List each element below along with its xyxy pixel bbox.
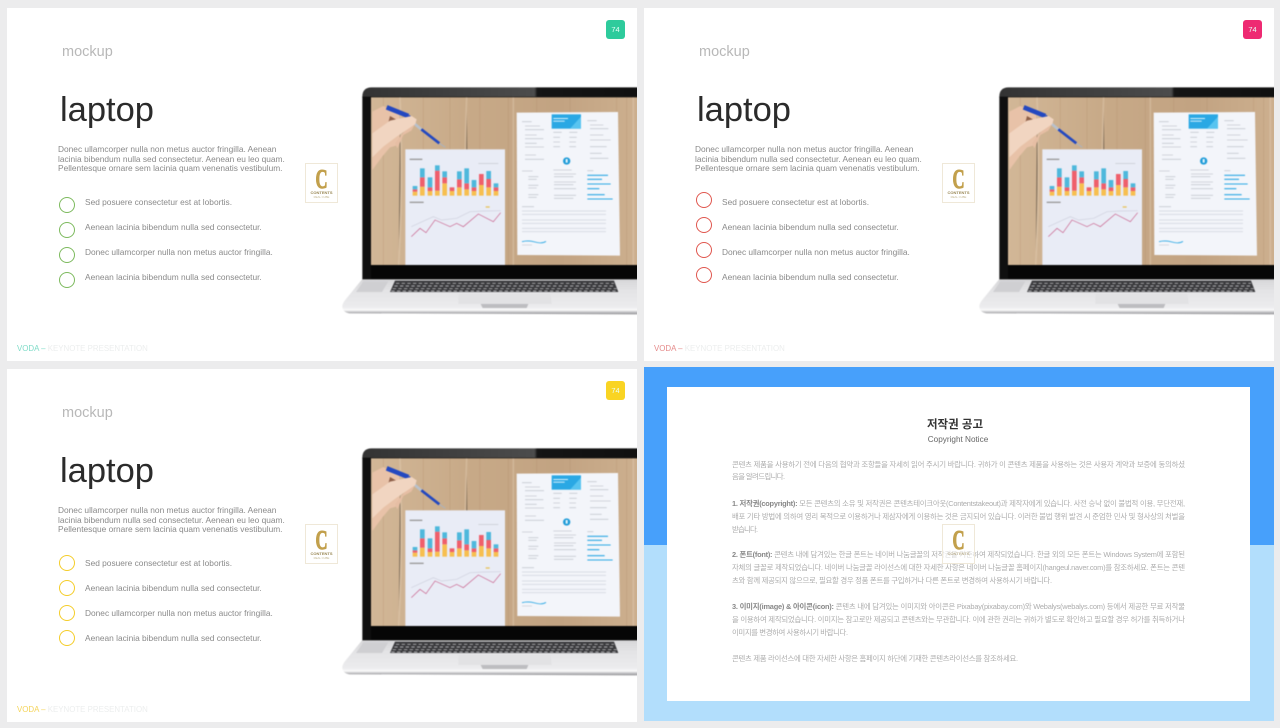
list item 4 [59,630,262,646]
section label: mockup [699,44,750,60]
notice body: 콘텐츠 제품을 사용하기 전에 다음의 협약과 조항들을 자세히 읽어 주시기 바랍니다. 귀하가 이 콘텐츠 제품을 사용하는 것은 사용자 계약과 보증에 동의하셨 [732,460,1185,469]
intro paragraph: Donec ullamcorper nulla non metus auctor fringilla. Aenean [695,144,913,154]
notice body: 음을 알려드립니다. [732,472,785,481]
panel: red laptop slide [644,8,1274,361]
heading: laptop [60,452,154,490]
list item 1: Sed posuere consectetur est at lobortis. [85,558,232,568]
list item 3: Donec ullamcorper nulla non metus auctor fringilla. [85,608,273,618]
heading: laptop [697,91,791,129]
intro paragraph: lacinia bibendum nulla sed consectetur. Aenean eu leo quam. [58,515,285,525]
list item 4 [696,267,899,283]
list item 2: Aenean lacinia bibendum nulla sed consectetur. [85,583,262,593]
intro paragraph: Donec ullamcorper nulla non metus auctor fringilla. Aenean [58,505,276,515]
notice title: 저작권 공고 [927,417,983,431]
logo watermark: C [952,525,965,555]
intro paragraph: Pellentesque ornare sem lacinia quam venenatis vestibulum. [58,524,282,534]
list item 3: Donec ullamcorper nulla non metus auctor fringilla. [722,247,910,257]
notice body: 츠와 함께 제공되지 않으므로, 필요할 경우 정품 폰트를 구입하거나 다른 폰트로 변경하여 사용하시기 바랍니다. [732,576,1052,585]
intro paragraph: Donec ullamcorper nulla non metus auctor fringilla. Aenean [58,144,276,154]
logo watermark [305,163,338,203]
page number tag [606,381,625,400]
logo watermark: REAL CUBE [951,195,966,199]
footer: VODA – KEYNOTE PRESENTATION [17,344,148,353]
intro paragraph [58,505,285,534]
notice body: 2. 폰트(font): 콘텐츠 내에 담겨있는 한글 폰트는 네이버 나눔글꼴의 저작권을 기준하여 제작되었습니다. 한글 외의 모든 폰트는 Windows System에 포함된 [732,550,1185,559]
logo watermark: CONTENTS [310,190,332,195]
logo watermark: CONTENTS [310,551,332,556]
intro paragraph: lacinia bibendum nulla sed consectetur. Aenean eu leo quam. [695,154,922,164]
notice body: 1. 저작권(copyright): 모든 콘텐츠의 소유 및 저작권은 콘텐츠테이크아웃(Contentstakeout)과 제작자에게 있습니다. 사전 승낙 없이 불법적 이용, 무단전재, [732,499,1185,508]
logo watermark: REAL CUBE [314,195,329,199]
list item 4: Aenean lacinia bibendum nulla sed consectetur. [85,633,262,643]
heading: laptop [60,91,154,129]
logo watermark [942,524,975,564]
section label: mockup [62,405,113,421]
notice subtitle: Copyright Notice [928,435,989,444]
list item 3 [59,247,273,263]
notice body: 받습니다. [732,525,758,534]
list item 4: Aenean lacinia bibendum nulla sed consectetur. [722,272,899,282]
logo watermark: C [315,164,328,194]
laptop image [342,448,637,676]
white notice card [667,387,1250,701]
notice body: 을 이용하여 제작되었습니다. 이미지는 참고로만 제공되고 콘텐츠와는 무관합니다. 이에 관한 권리는 귀하가 별도로 확인하고 필요할 경우 허가를 취득하거나 [732,615,1185,624]
page number tag: 74 [1248,25,1257,34]
notice body: 3. 이미지(image) & 아이콘(icon): 콘텐츠 내에 담겨있는 이미지와 아이콘은 Pixabay(pixabay.com)와 Webalys(webalys.com) 등에서 제공한 무료 저작물 [732,602,1185,611]
logo watermark [942,163,975,203]
intro paragraph [695,144,922,173]
list item 2 [59,580,262,596]
page number tag: 74 [611,25,620,34]
list item 2: Aenean lacinia bibendum nulla sed consectetur. [85,222,262,232]
logo watermark: CONTENTS [948,551,970,556]
list item 4 [59,272,262,288]
list item 3: Donec ullamcorper nulla non metus auctor fringilla. [85,247,273,257]
list item 4: Aenean lacinia bibendum nulla sed consectetur. [85,272,262,282]
panel: yellow laptop slide [7,369,637,722]
list item 1 [59,555,232,571]
list item 1 [696,192,869,208]
logo watermark: C [952,164,965,194]
laptop image [979,86,1274,315]
logo watermark [305,524,338,564]
light blue lower band [644,545,1274,721]
section label: mockup [62,44,113,60]
logo watermark: C [315,525,328,555]
panel: copyright notice [644,367,1274,721]
notice body: 이미지를 변경하여 사용하시기 바랍니다. [732,628,848,637]
page number tag [1243,20,1262,39]
list item 1: Sed posuere consectetur est at lobortis. [722,197,869,207]
notice body [732,460,1185,663]
list item 3 [59,605,273,621]
notice body: 자체의 글꼴로 제작되었습니다. 네이버 나눔글꼴 라이선스에 대한 자세한 사항은 네이버 나눔글꼴 홈페이지(hangeul.naver.com)를 참조하세요. 폰트는 콘텐 [732,563,1185,572]
list item 1: Sed posuere consectetur est at lobortis. [85,197,232,207]
panel: green laptop slide [7,8,637,361]
intro paragraph: Pellentesque ornare sem lacinia quam venenatis vestibulum. [695,163,919,173]
page number tag: 74 [611,386,620,395]
list item 2 [696,217,899,233]
logo watermark: CONTENTS [948,190,970,195]
intro paragraph [58,144,285,173]
footer: VODA – KEYNOTE PRESENTATION [654,344,785,353]
list item 2: Aenean lacinia bibendum nulla sed consectetur. [722,222,899,232]
list item 3 [696,242,910,258]
logo watermark: REAL CUBE [314,556,329,560]
intro paragraph: lacinia bibendum nulla sed consectetur. Aenean eu leo quam. [58,154,285,164]
list item 1 [59,197,232,213]
page number tag [606,20,625,39]
footer: VODA – KEYNOTE PRESENTATION [17,705,148,714]
notice body: 콘텐츠 제품 라이선스에 대한 자세한 사항은 홈페이지 하단에 기재한 콘텐츠라이선스를 참조하세요. [732,654,1018,663]
laptop image [342,86,637,315]
notice body: 배포 기타 방법에 의하여 영리 목적으로 이용하거나 제삼자에게 이용하는 것은 금지되어 있습니다. 이러한 불법 행위 발견 시 준엄한 민사 및 형사상의 처벌을 [732,512,1185,521]
intro paragraph: Pellentesque ornare sem lacinia quam venenatis vestibulum. [58,163,282,173]
notice text [732,417,1185,663]
list item 2 [59,222,262,238]
